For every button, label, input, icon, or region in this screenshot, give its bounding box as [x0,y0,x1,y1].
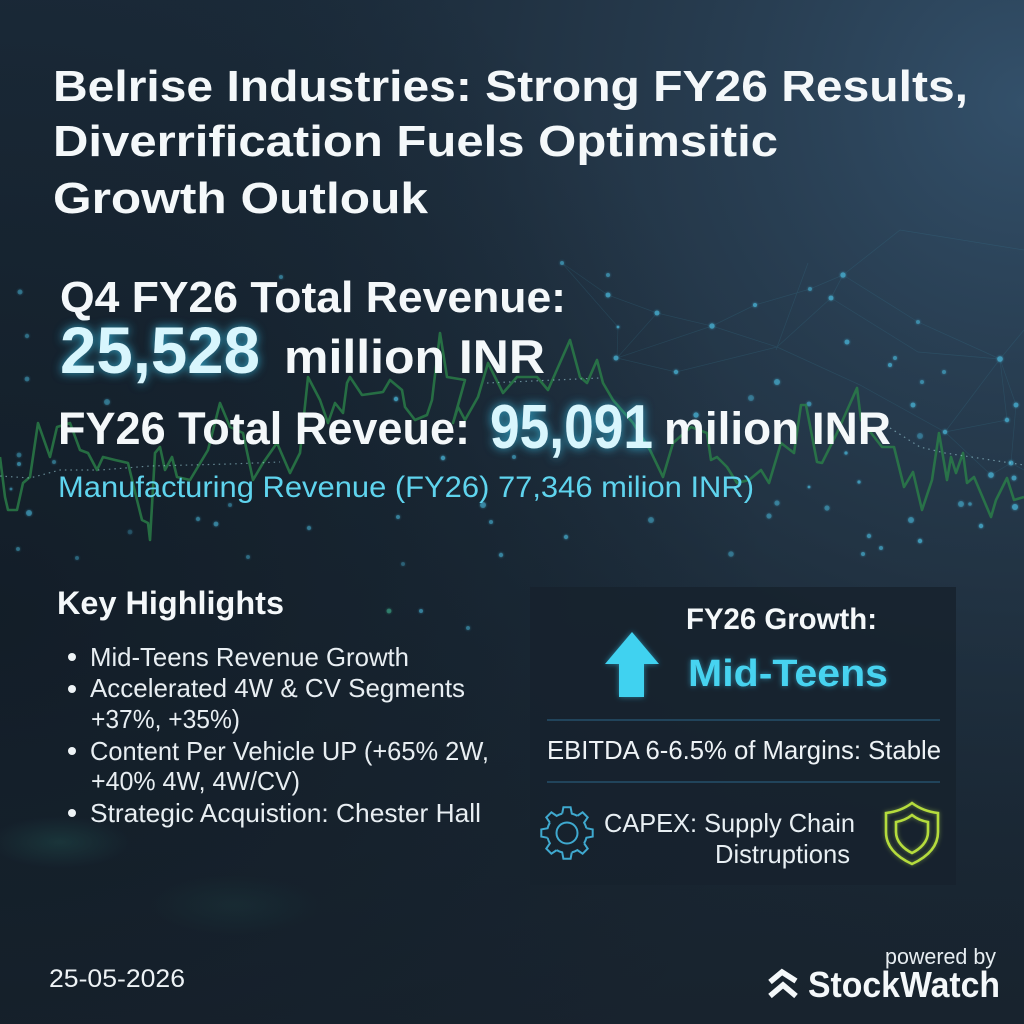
Q4 revenue block [60,273,566,387]
Q4 revenue block: million INR [284,330,545,383]
Q4 revenue block: Q4 FY26 Total Revenue: [60,273,566,322]
CAPEX text: CAPEX: Supply Chain [604,808,855,838]
title: Growth Outlouk [53,174,429,223]
key highlights list: Content Per Vehicle UP (+65% 2W, [90,736,489,766]
manufacturing revenue: Manufacturing Revenue (FY26) 77,346 milion INR) [58,471,754,504]
title: Diverrification Fuels Optimsitic [53,117,778,166]
chart: green market line [0,333,1024,540]
CAPEX text: Distruptions [715,839,850,869]
brand: powered by StockWatch: powered by [885,944,996,969]
key highlights list: +37%, +35%) [91,704,240,734]
key highlights list [68,642,489,828]
FY26 revenue block: 95,091 [490,393,653,462]
icon: shield [886,803,938,864]
title: Belrise Industries: Strong FY26 Results, [53,62,968,111]
growth label: FY26 Growth: [686,603,877,636]
FY26 revenue block: FY26 Total Reveue: [58,403,470,454]
key highlights list: Mid-Teens Revenue Growth [90,642,409,672]
CAPEX text [604,808,855,869]
date: 25-05-2026 [49,965,185,993]
icon: StockWatch logo [770,972,796,996]
EBITDA line: EBITDA 6-6.5% of Margins: Stable [547,735,941,765]
panel: FY26 growth [530,587,956,885]
icon: gear [541,807,593,859]
FY26 revenue block: milion INR [664,403,891,454]
key highlights heading: Key Highlights [57,585,284,621]
brand: powered by StockWatch: StockWatch [808,964,1000,1005]
title [53,62,968,223]
growth value: Mid-Teens [688,653,888,695]
key highlights list: +40% 4W, 4W/CV) [91,766,300,796]
brand: powered by StockWatch [770,944,1000,1005]
Q4 revenue block: 25,528 [60,313,260,387]
FY26 revenue block [58,393,891,462]
key highlights list: Accelerated 4W & CV Segments [90,673,465,703]
icon: up arrow [605,632,659,697]
key highlights list: Strategic Acquistion: Chester Hall [90,798,481,828]
network of nodes [10,230,1024,630]
